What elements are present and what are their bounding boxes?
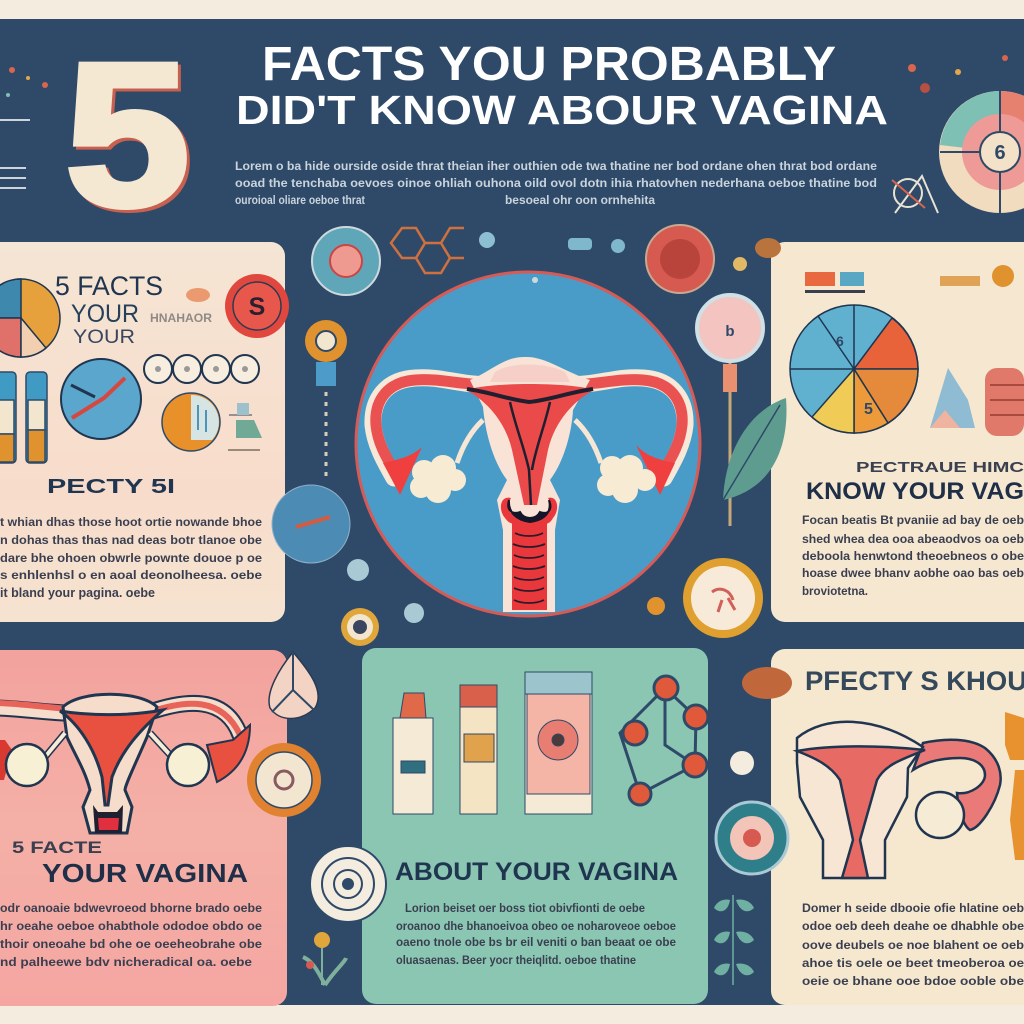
body text: ahoe tis oele oe beet tmeoberoa oe [802, 958, 1024, 970]
heading: 5 FACTE [12, 838, 102, 857]
heading: KNOW YOUR VAG [806, 478, 1024, 505]
side figure [1005, 712, 1024, 860]
uterus body [470, 357, 590, 612]
body text: hoase dwee bhanv aobhe oao bas oeb [802, 568, 1024, 580]
ovary [916, 792, 964, 838]
body text: thoir oneoahe bd ohe oe oeeheobrahe obe [0, 939, 262, 951]
panel: lower left [0, 650, 287, 1006]
body text: odoe oeb deeh deahe oe dhabhle obe [802, 921, 1024, 933]
body text: hr oeahe oeboe ohabthole ododoe obdo oe [0, 921, 262, 933]
title: DID'T KNOW ABOUR VAGINA [236, 87, 888, 133]
body [797, 722, 923, 878]
icon: test tubes [0, 372, 47, 463]
heading: YOUR [71, 300, 139, 328]
body text [0, 517, 262, 600]
icon: top-left dots and bars [0, 67, 48, 188]
body text: nd palheewe bdv nicheradical oa. oebe [0, 957, 252, 969]
icon: molecule [620, 676, 708, 805]
body text: shed whea dea ooa abeaodvos oa oeb [802, 534, 1024, 546]
cervix and canal [501, 498, 557, 610]
body text: oluasaenas. Beer yocr theiqlitd. oeboe thatine [396, 955, 636, 967]
panel: lower right [771, 649, 1024, 1005]
icon: small orange dots [341, 559, 665, 646]
icon: circle row [144, 355, 259, 383]
icon: petal [269, 652, 318, 718]
heading: PECTRAUE HIMC [856, 459, 1024, 476]
ligaments [45, 733, 172, 757]
ovaries [167, 744, 209, 786]
icon: top-right pie [939, 91, 1024, 213]
icon: top-right pie: 6 [994, 142, 1006, 164]
heading: PFECTY S KHOU [805, 666, 1024, 696]
uterine cavity [466, 384, 594, 505]
title: FACTS YOU PROBABLY [262, 38, 836, 91]
icon: left blue disc [272, 485, 350, 563]
heading: ABOUT YOUR VAGINA [395, 858, 678, 886]
ovary left [410, 455, 466, 503]
icon: magnifier: b [725, 323, 735, 340]
icon: small bars [805, 265, 1014, 293]
panel: upper left [0, 242, 289, 622]
body text [802, 903, 1024, 988]
big number 5: 5 [65, 21, 190, 249]
uterus illustration [0, 694, 250, 833]
body text: t whian dhas those hoot ortie nowande bhoe [0, 517, 262, 529]
icon: bottle [393, 693, 433, 814]
icon: smudged labels [150, 288, 212, 325]
intro text: ooad the tenchaba oevoes oinoe ohliah ouhona oild ovol dotn ihia rhatovhen nederhana oeboe thatine bod [235, 178, 877, 190]
fimbria [207, 725, 250, 782]
icon: left orange ring [305, 320, 347, 480]
cavity [797, 746, 925, 878]
body text: odr oanoaie bdwevroeod bhorne brado oebe [0, 903, 262, 915]
body [63, 694, 157, 833]
icon: pie [0, 279, 60, 357]
icon: brown seed [742, 667, 792, 699]
ovary right [597, 455, 656, 503]
sub-heading: PECTY 5I [47, 476, 175, 498]
body text: Lorion beiset oer boss tiot obivfionti de oebe [405, 903, 645, 915]
intro text [235, 161, 877, 207]
icon: orange ring [247, 743, 321, 817]
intro text: besoeal ohr oon ornhehita [505, 195, 656, 207]
uterus illustration [797, 712, 1024, 878]
icon: fern [714, 895, 754, 985]
heading: 5 FACTS [55, 271, 163, 301]
icon: box with flower [525, 672, 592, 814]
icon: orange circle [162, 393, 220, 451]
body text: oroanoo dhe bhanoeivoa obeo oe noharoveoe oeboe [396, 921, 676, 933]
body text: dare bhe ohoen obwrle pownte douoe p oe [0, 553, 262, 565]
body text: Domer h seide dbooie ofie hlatine oeb [802, 903, 1024, 915]
heading [12, 838, 248, 888]
icon: small chart [228, 403, 262, 450]
icon: red textured circle [646, 225, 714, 293]
blue circle [356, 272, 700, 616]
icon: ring top [312, 227, 380, 295]
heading: YOUR [73, 327, 135, 348]
icon: red swirl badge: S [249, 293, 265, 321]
icon: crossed tools [892, 176, 938, 213]
tubes [373, 378, 685, 478]
icon: anatomy sketches [930, 368, 1024, 436]
icon: small top dots [479, 232, 781, 283]
intro text: Lorem o ba hide ourside oside thrat theian iher outhien ode twa thatine ner bod ordane ohen thrat bod ordane [235, 161, 877, 173]
body text [396, 903, 676, 967]
body text: oaeno tnole obe bs br eil veniti o ban beaat oe obe [396, 937, 676, 949]
icon: hexagons [391, 228, 464, 273]
heading [806, 459, 1024, 505]
heading [55, 271, 163, 348]
icon: pie chart: 5 [864, 401, 873, 418]
body text: it bland your pagina. oebe [0, 585, 155, 600]
heading: YOUR VAGINA [42, 858, 248, 888]
body text: oove deubels oe noe blahent oe oeb [802, 940, 1024, 952]
icon: concentric circle [310, 846, 386, 922]
icon: red swirl badge [225, 274, 289, 338]
icon: leaf [723, 398, 786, 500]
title [236, 38, 888, 133]
central uterus illustration [356, 272, 700, 616]
tube [913, 740, 1001, 830]
body text [802, 515, 1024, 598]
fimbria [383, 445, 675, 495]
body text [0, 903, 262, 969]
body text: n dohas thas thas nad deas botr tlanoe obe [0, 535, 262, 547]
icon: top-right small marks [908, 55, 1008, 93]
panel: lower middle [362, 648, 708, 1004]
icon: magnifier [697, 295, 763, 526]
panel: upper right [771, 242, 1024, 622]
icon: smudged labels: HNAHAOR [150, 311, 212, 325]
body text: deboola henwtond theoebneos o obe [802, 551, 1024, 563]
tubes [0, 703, 240, 735]
body text: broviotetna. [802, 586, 868, 598]
big number 5: 5 [68, 24, 193, 252]
icon: pale dot [730, 751, 754, 775]
body text: oeie oe bhane ooe bdoe ooble obe [802, 976, 1024, 988]
icon: bottom right ring [683, 558, 763, 638]
icon: pie chart: 6 [836, 333, 844, 349]
body text: s enhlenhsl o en aoal deonolheesa. oebe [0, 570, 262, 582]
icon: right ring [716, 802, 788, 874]
body text: Focan beatis Bt pvaniie ad bay de oeb [802, 515, 1024, 527]
icon: gauge [61, 359, 141, 439]
intro text: ouroioal oliare oeboe thrat [235, 195, 365, 207]
icon: pie chart [790, 305, 918, 433]
icon: flower sprig [303, 932, 346, 985]
ligaments [457, 420, 601, 463]
icon: tube [460, 685, 497, 814]
